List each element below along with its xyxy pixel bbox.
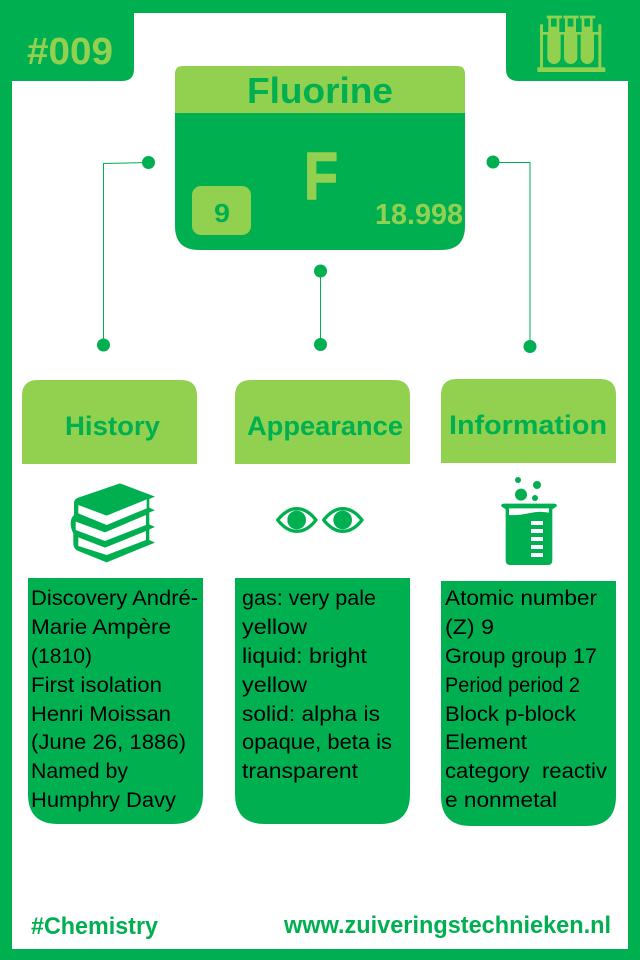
text block: information facts: e nonmetal bbox=[445, 789, 557, 812]
heading: appearance bbox=[235, 380, 410, 464]
text block: appearance facts: gas: very pale bbox=[242, 587, 376, 610]
text block: appearance facts: yellow bbox=[242, 616, 308, 639]
icon: stack of books bbox=[71, 483, 155, 562]
element name: Fluorine bbox=[247, 70, 393, 111]
element card: fluorine bbox=[175, 66, 465, 250]
text block: history facts: (1810) bbox=[31, 645, 92, 668]
heading: information: Information bbox=[449, 410, 607, 440]
text block: history facts: Marie Ampère bbox=[31, 616, 171, 639]
atomic number badge: 9 bbox=[214, 198, 230, 228]
text block: appearance facts: transparent bbox=[242, 760, 358, 783]
footer hashtag: #Chemistry bbox=[31, 913, 159, 940]
text block: information facts: Group group 17 bbox=[445, 645, 597, 668]
tab: element number: #009 bbox=[27, 31, 113, 73]
connector: history bbox=[97, 156, 155, 352]
text block: appearance facts: liquid: bright bbox=[242, 645, 367, 668]
tab: test tubes icon bbox=[506, 0, 640, 81]
panel: history bbox=[22, 380, 203, 824]
text block: information facts: Element bbox=[445, 731, 527, 754]
panel: appearance bbox=[235, 380, 410, 824]
text block: history facts bbox=[28, 578, 203, 824]
panel: information bbox=[441, 379, 616, 826]
text block: appearance facts: yellow bbox=[242, 674, 308, 697]
text block: information facts: (Z) 9 bbox=[445, 616, 494, 639]
card body bbox=[175, 113, 465, 250]
text block: information facts: Block p-block bbox=[445, 703, 577, 726]
heading: information bbox=[441, 379, 616, 463]
text block: history facts: Humphry Davy bbox=[31, 789, 177, 812]
footer website: www.zuiveringstechnieken.nl bbox=[283, 912, 611, 939]
card header bbox=[175, 66, 465, 113]
text block: history facts: First isolation bbox=[31, 674, 162, 697]
connector: information bbox=[486, 156, 536, 353]
icon: beaker with bubbles bbox=[501, 477, 557, 565]
atomic number badge bbox=[192, 186, 251, 235]
text block: history facts: Henri Moissan bbox=[31, 703, 171, 726]
text block: information facts: Period period 2 bbox=[445, 674, 580, 697]
text block: appearance facts bbox=[235, 578, 410, 824]
text block: information facts: Atomic number bbox=[445, 587, 597, 610]
text block: appearance facts: solid: alpha is bbox=[242, 703, 380, 726]
atomic mass: 18.998 bbox=[375, 199, 463, 231]
connector: appearance bbox=[314, 264, 327, 351]
text block: information facts bbox=[441, 581, 616, 826]
text block: history facts: Discovery André- bbox=[31, 587, 198, 610]
heading: history bbox=[22, 380, 197, 464]
text block: information facts: category reactiv bbox=[445, 760, 608, 783]
heading: appearance: Appearance bbox=[247, 411, 403, 441]
tab: element number bbox=[0, 0, 134, 81]
icon: pair of eyes bbox=[278, 509, 362, 531]
text block: appearance facts: opaque, beta is bbox=[242, 731, 392, 754]
element symbol: F bbox=[304, 139, 338, 214]
text block: history facts: (June 26, 1886) bbox=[31, 731, 186, 754]
text block: history facts: Named by bbox=[31, 760, 128, 783]
heading: history: History bbox=[65, 411, 160, 441]
